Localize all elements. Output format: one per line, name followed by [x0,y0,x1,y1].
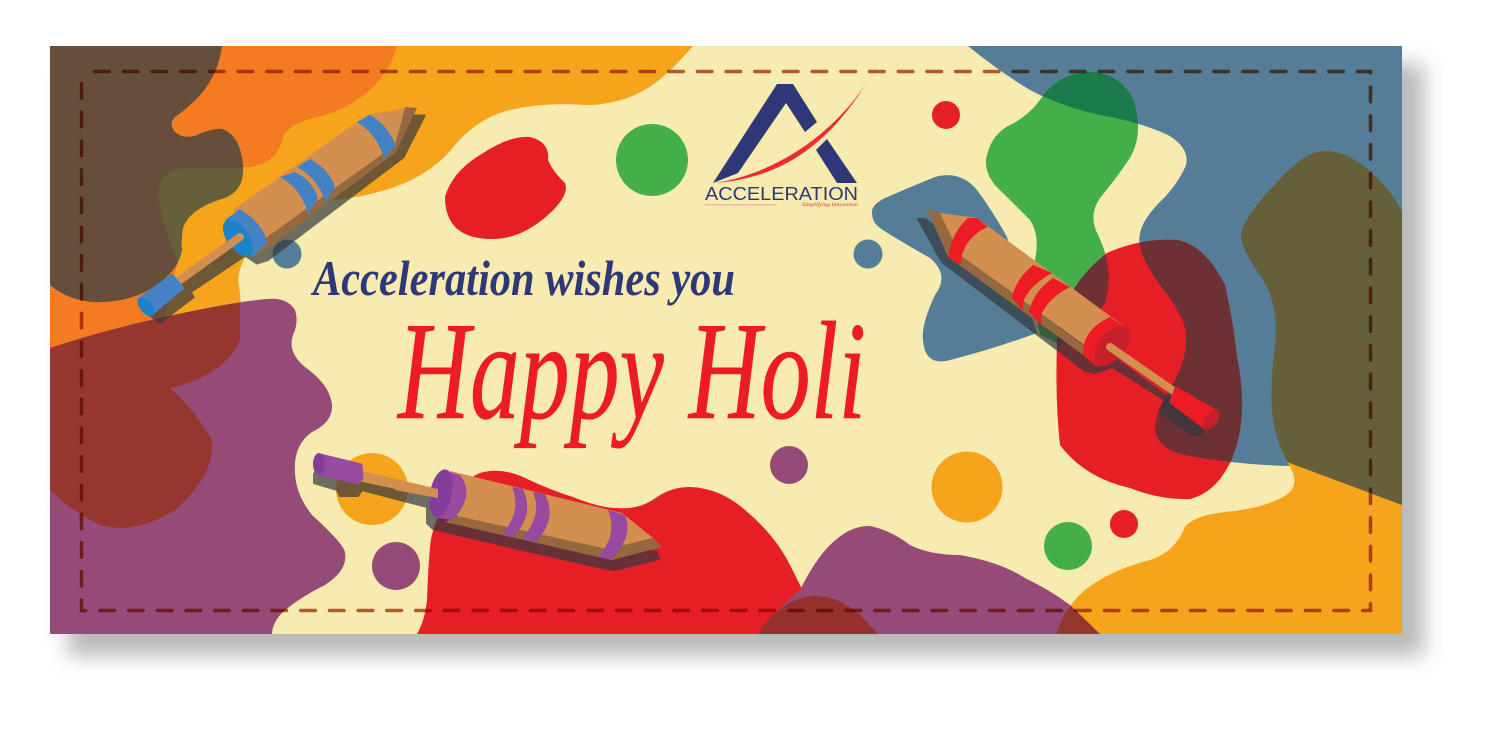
pen handle rod [1110,347,1175,392]
pen handle cap [1171,388,1217,428]
dashed border [82,72,1370,610]
dots [272,101,1138,590]
pen handle cap [140,276,182,313]
card drop shadow [68,64,1424,656]
pen cap face [217,214,259,262]
pen handle rod [176,242,232,284]
blob: purple and orange overlap [50,280,240,528]
dot: red bottom [1110,510,1138,538]
blob: bottom purple [758,526,1100,634]
logo [705,64,878,208]
dot: amber right [932,452,1002,522]
pen handle cap [320,455,362,483]
pichkari: red [918,209,1223,435]
blob: top-left brown overlap [50,46,243,302]
pen side face [445,516,662,560]
pen end cap [437,470,466,520]
dot: green bottom [1044,522,1092,570]
blob: green [986,72,1138,345]
blob: red and blue overlap [1140,240,1242,462]
blob: top-left olive [50,46,243,302]
pen middle band 1 [502,487,527,537]
blob: green and blue overlap [1042,72,1138,124]
blob: bottom red [417,471,805,634]
dot: purple centre [770,446,808,484]
logo mark A right [816,139,857,183]
pen tip band [948,218,988,265]
blob: purple and amber overlap [1056,606,1100,634]
logo underline [705,204,777,206]
blob: top-right blue [968,46,1402,466]
heading: wishes line: Acceleration wishes you [310,250,735,306]
blob: top-left deep orange [50,46,397,348]
pen side face [256,107,417,257]
pen rod front [395,480,438,498]
pen cap face [425,467,457,519]
dot: red top [932,101,960,129]
pen end cap [225,209,267,257]
holi greeting card infographic [50,46,1436,668]
pen handle rod [358,470,438,498]
pen middle band 1 [280,172,318,215]
heading: Happy Holi: Happy Holi [397,294,866,449]
blob: left purple [50,299,345,634]
blob: middle blue [872,175,1037,361]
pen rod front [185,237,240,276]
pen top face [940,213,1125,347]
dot: blue left [272,240,302,268]
logo tagline: Simplifying Innovation [802,201,858,208]
pen handle cap face [313,453,325,475]
blob: bottom-right amber [1056,462,1402,634]
pen middle band 1 [1012,265,1052,310]
blob: red and green overlap [1057,254,1109,345]
pen tip band [357,115,396,159]
pen tip band [598,510,628,559]
pen middle band 2 [297,159,335,203]
pichkari: blue [134,107,424,322]
pen handle cap face [134,295,158,319]
dot: blue right [854,240,882,268]
logo wordmark: ACCELERATION [705,184,858,204]
pen top face [233,108,405,240]
pen cap face [1087,319,1137,373]
blob: right olive [1241,151,1402,507]
pen side face [927,209,1097,365]
logo mark A left [713,84,817,183]
pen middle band 2 [1029,278,1070,325]
card background [50,46,1402,634]
pen top face [450,471,653,549]
pen shadow [150,116,424,322]
dot: amber left [336,453,408,525]
pichkari: purple [313,453,662,570]
logo swoosh [713,64,878,183]
blob: right red [1056,240,1242,499]
pen handle cap face [1199,408,1223,432]
blob: top centre red [445,137,566,239]
pen shadow [314,465,659,570]
pen end cap [1083,317,1125,367]
dot: purple left [372,542,420,590]
blob: bottom dark red lobe [758,596,878,634]
pen shadow [918,219,1206,435]
dot: green top [616,124,688,196]
blob: top-left amber [164,46,693,317]
pen middle band 2 [522,492,550,542]
